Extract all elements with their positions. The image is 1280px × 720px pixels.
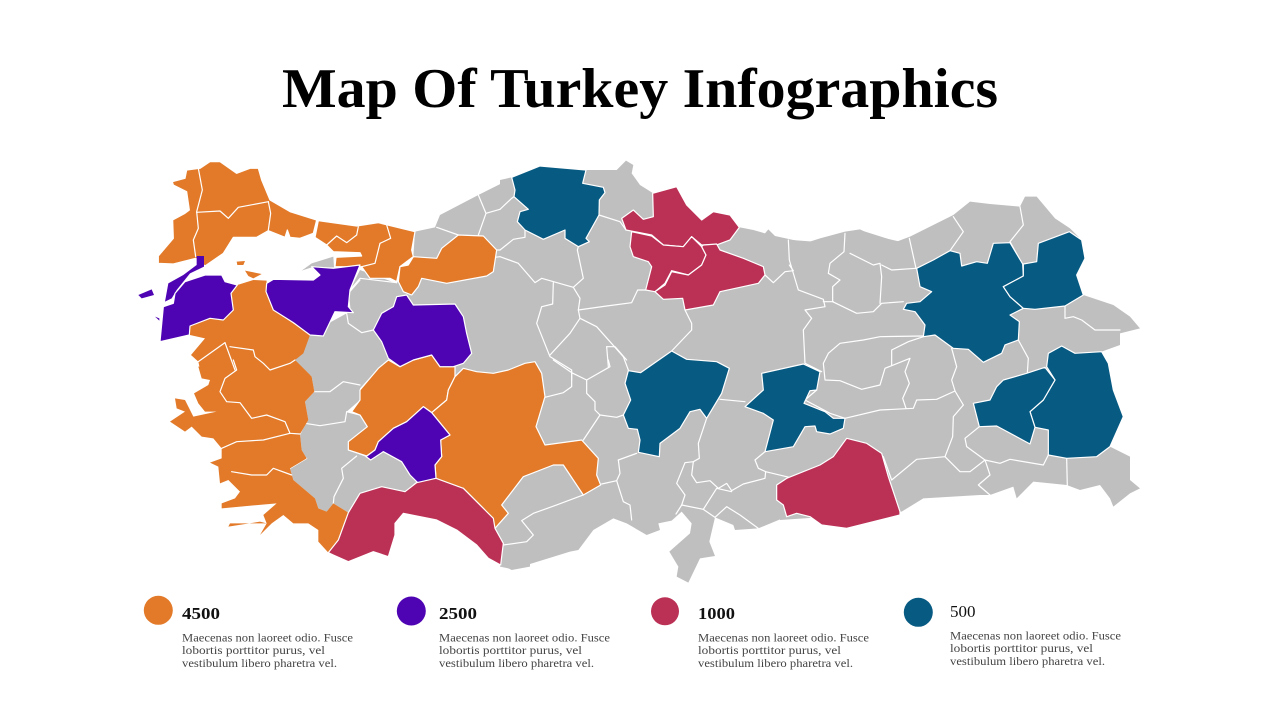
legend: 500: [904, 598, 1121, 668]
description: Maecenas non laoreet odio. Fusce: [182, 630, 353, 644]
region group: 2500 purple provinces: [138, 256, 472, 483]
province borders in gray area: [290, 195, 1120, 545]
description: vestibulum libero pharetra vel.: [950, 654, 1105, 668]
description: lobortis porttitor purus, vel: [182, 643, 326, 657]
description: vestibulum libero pharetra vel.: [698, 656, 853, 670]
value: 2500: [439, 604, 477, 623]
gray base provinces: [290, 161, 1140, 583]
value: 500: [950, 602, 976, 621]
legend: 2500: [397, 596, 610, 670]
legend: 1000: [651, 597, 869, 670]
orange inner borders: [193, 168, 391, 475]
icon: purple dot: [397, 596, 426, 626]
description: vestibulum libero pharetra vel.: [182, 656, 337, 670]
description: Maecenas non laoreet odio. Fusce: [439, 630, 610, 644]
description: Maecenas non laoreet odio. Fusce: [950, 628, 1121, 642]
icon: red dot: [651, 597, 679, 625]
description: lobortis porttitor purus, vel: [950, 641, 1094, 655]
region group: 1000 red provinces: [328, 187, 900, 565]
description: lobortis porttitor purus, vel: [439, 643, 583, 657]
description: lobortis porttitor purus, vel: [698, 643, 842, 657]
description: [698, 630, 869, 670]
title: Map Of Turkey Infographics: [282, 58, 998, 120]
map of Turkey: [138, 161, 1140, 583]
description: Maecenas non laoreet odio. Fusce: [698, 630, 869, 644]
legend: 4500: [144, 596, 353, 670]
icon: blue dot: [904, 598, 933, 627]
value: 1000: [698, 604, 735, 623]
description: vestibulum libero pharetra vel.: [439, 656, 594, 670]
description: [182, 630, 353, 670]
value: 4500: [182, 604, 220, 623]
region group: 500 blue provinces: [512, 166, 1123, 458]
region group: 4500 orange provinces: [158, 162, 601, 553]
description: [439, 630, 610, 670]
icon: orange dot: [144, 596, 173, 625]
description: [950, 628, 1121, 668]
